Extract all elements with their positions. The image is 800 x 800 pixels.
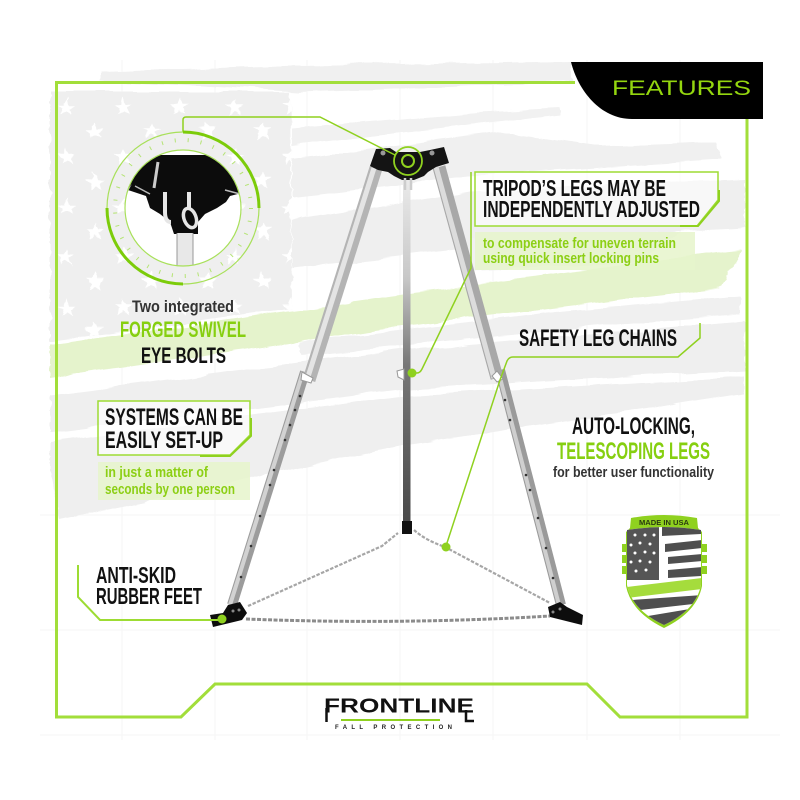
heading: INDEPENDENTLY ADJUSTED [483, 196, 700, 222]
callout: telescoping legs: TELESCOPING LEGS [557, 438, 710, 465]
caption: Two integrated [132, 297, 234, 316]
centre leg foot block [402, 521, 412, 534]
sub text: to compensate for uneven terrain [483, 235, 676, 252]
centre leg [403, 172, 410, 522]
heading: TRIPOD’S LEGS MAY BE [483, 175, 666, 201]
sub text: using quick insert locking pins [483, 250, 659, 267]
logo [324, 696, 474, 731]
background watermark: distressed flag [40, 60, 780, 740]
caption: FORGED SWIVEL [120, 317, 246, 342]
page frame [56, 82, 747, 717]
heading box [98, 401, 250, 455]
sub text: in just a matter of [105, 464, 209, 481]
heading [96, 562, 202, 609]
caption [120, 297, 246, 368]
sub panel [98, 462, 250, 500]
callout: rubber feet [78, 562, 226, 624]
callout: telescoping legs: AUTO-LOCKING, [572, 413, 695, 440]
detail lens [107, 132, 259, 284]
logo rule [341, 719, 440, 721]
hub ring [394, 147, 422, 175]
heading [105, 404, 243, 454]
heading: SYSTEMS CAN BE [105, 404, 243, 431]
callout: independently adjusted legs [408, 172, 719, 378]
left leg [230, 168, 376, 605]
sub panel [475, 232, 695, 270]
sub text: seconds by one person [105, 481, 235, 498]
tripod [210, 147, 583, 627]
leg pins [301, 369, 503, 383]
callout: telescoping legs: for better user functionality [553, 464, 715, 481]
callout: set-up [98, 401, 251, 500]
hub eye bolts [405, 178, 411, 190]
heading: ANTI-SKID [96, 562, 176, 588]
sub text [105, 464, 235, 498]
tagline: FALL PROTECTION [335, 725, 452, 731]
badge: made in USA shield [622, 515, 707, 628]
right leg [436, 167, 561, 605]
leg holes [240, 395, 554, 579]
heading: RUBBER FEET [96, 583, 202, 609]
left foot [210, 602, 247, 627]
leader line and dot [78, 565, 222, 620]
features tab [571, 62, 763, 119]
hub [370, 147, 449, 180]
features heading: FEATURES [612, 77, 751, 100]
chains [246, 530, 550, 621]
leader line and dot [446, 323, 700, 546]
heading: SAFETY LEG CHAINS [519, 325, 677, 352]
leader line and dot [412, 172, 471, 373]
heading [483, 175, 700, 222]
heading: EASILY SET-UP [105, 427, 223, 454]
wordmark: FRONTLINE [324, 696, 474, 718]
callout: forged swivel eye bolts [107, 117, 422, 368]
leader line [183, 117, 395, 155]
badge label: MADE IN USA [639, 518, 690, 527]
caption: EYE BOLTS [141, 343, 226, 368]
right foot [548, 602, 583, 625]
sub text [483, 235, 676, 267]
heading box [475, 172, 718, 226]
callout: safety leg chains [442, 323, 700, 552]
callout: telescoping legs [553, 413, 715, 481]
